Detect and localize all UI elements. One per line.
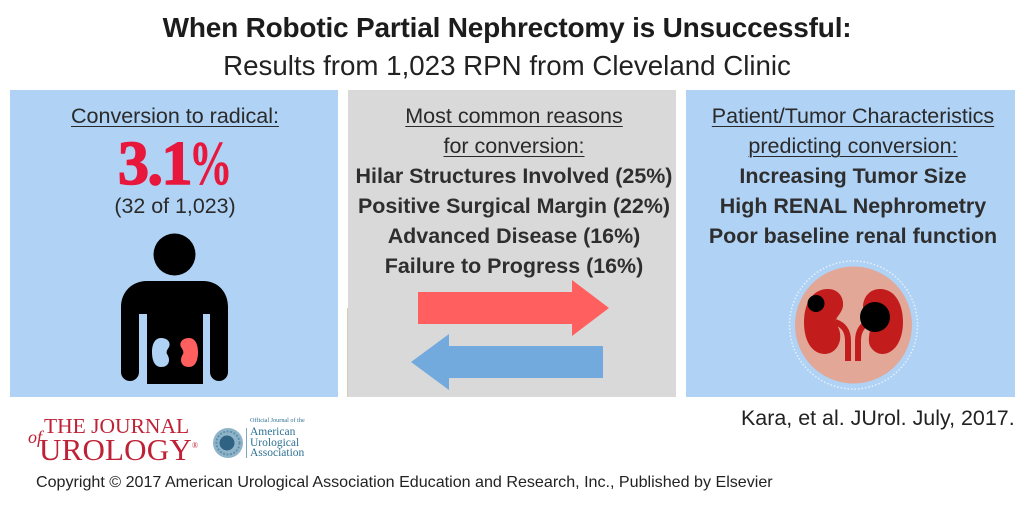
logo: The Journal of Urology: of bbox=[28, 427, 42, 447]
list: reasons: Positive Surgical Margin (22%) bbox=[358, 194, 670, 218]
list: characteristics: Poor baseline renal function bbox=[709, 224, 997, 248]
logo: American Urological Association bbox=[213, 417, 305, 459]
heading: patient tumor characteristics: Patient/Tumor Characteristics bbox=[712, 104, 994, 128]
statistic: 3.1%: % bbox=[189, 130, 232, 198]
list: reasons: Hilar Structures Involved (25%) bbox=[356, 164, 672, 188]
heading: most common reasons: Most common reasons bbox=[405, 104, 623, 128]
logo: American Urological Association: American bbox=[250, 426, 295, 438]
logo: American Urological Association: Association bbox=[250, 447, 304, 459]
list: reasons bbox=[356, 164, 672, 278]
statistic note: (32 of 1,023) bbox=[114, 194, 236, 218]
title: When Robotic Partial Nephrectomy is Unsuccessful: bbox=[163, 12, 851, 43]
statistic: 3.1% bbox=[118, 130, 232, 198]
heading: predicting conversion: predicting conversion: bbox=[748, 134, 958, 158]
panel: characteristics bbox=[686, 90, 1015, 397]
list: characteristics bbox=[709, 164, 997, 248]
panel: reasons for conversion bbox=[348, 90, 676, 397]
list: reasons: Advanced Disease (16%) bbox=[388, 224, 640, 248]
logo: The Journal of Urology: THE JOURNAL bbox=[44, 414, 189, 438]
logo: American Urological Association: Official Journal of the bbox=[250, 417, 305, 424]
heading: conversion to radical: Conversion to radical: bbox=[71, 104, 279, 128]
panel: conversion to radical bbox=[10, 90, 338, 397]
citation: Kara, et al. JUrol. July, 2017. bbox=[741, 406, 1015, 430]
logo: The Journal of Urology bbox=[28, 414, 198, 467]
list: characteristics: High RENAL Nephrometry bbox=[720, 194, 986, 218]
subtitle: Results from 1,023 RPN from Cleveland Clinic bbox=[223, 50, 791, 81]
copyright: Copyright © 2017 American Urological Association Education and Research, Inc., Published by Elsevier bbox=[36, 473, 773, 491]
list: reasons: Failure to Progress (16%) bbox=[385, 254, 643, 278]
statistic: 3.1%: 3.1 bbox=[118, 130, 191, 198]
logo: American Urological Association: Urological bbox=[250, 436, 299, 448]
logo: The Journal of Urology: UROLOGY® bbox=[39, 432, 198, 467]
list: characteristics: Increasing Tumor Size bbox=[739, 164, 967, 188]
heading: for conversion: for conversion: bbox=[443, 134, 585, 158]
